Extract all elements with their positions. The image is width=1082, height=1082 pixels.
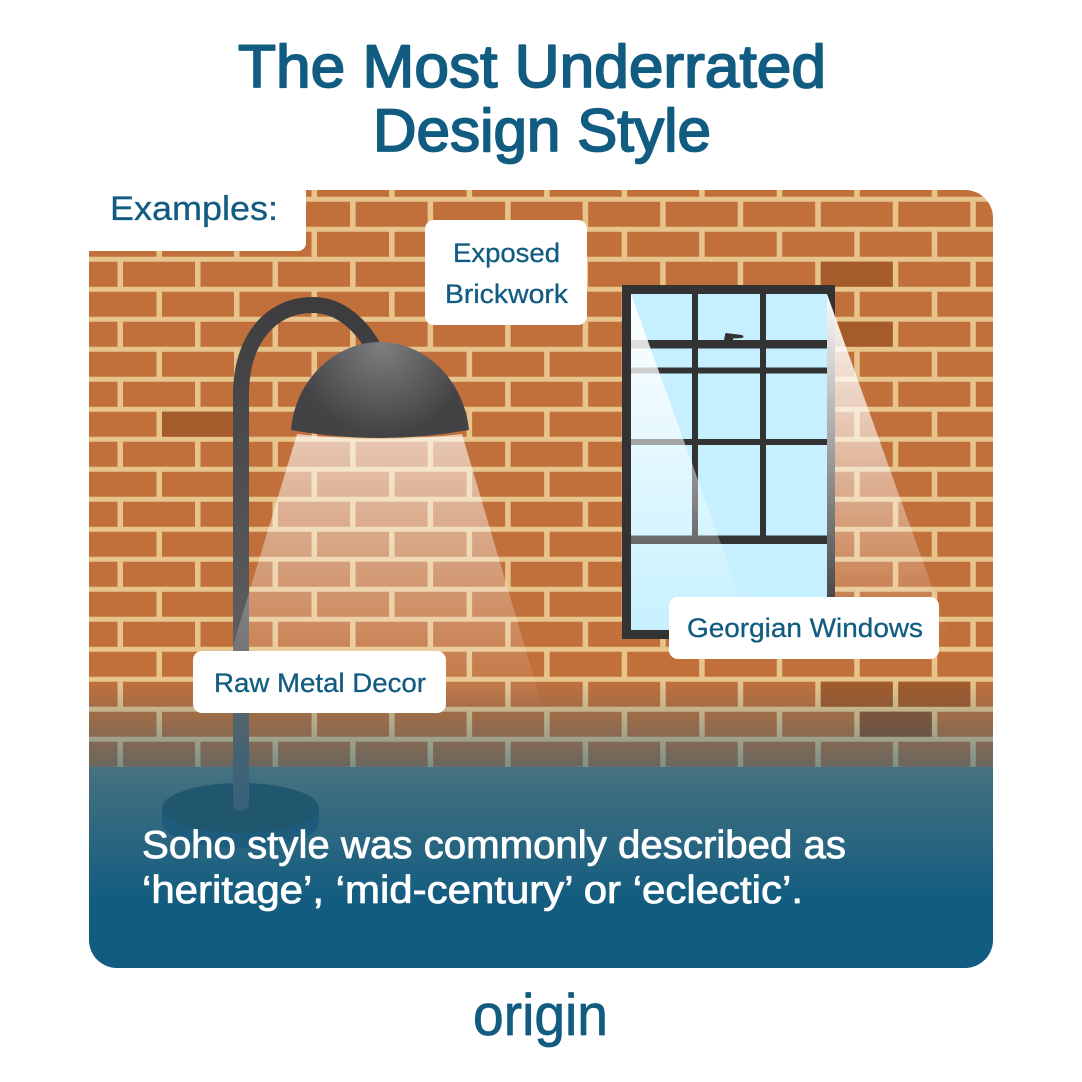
label: raw metal decor xyxy=(193,651,446,713)
title: The Most Underrated xyxy=(238,33,826,100)
label: georgian windows: Georgian Windows xyxy=(687,613,923,643)
floor xyxy=(89,767,993,968)
logo: origin: origin xyxy=(473,983,608,1048)
statement text xyxy=(142,824,846,912)
title: Design Style xyxy=(373,97,711,164)
statement text: Soho style was commonly described as xyxy=(142,824,846,867)
brick wall xyxy=(89,190,993,767)
label: exposed brickwork: Brickwork xyxy=(445,279,569,309)
icon: georgian window xyxy=(622,285,951,640)
label: exposed brickwork: Exposed xyxy=(453,238,560,268)
label: raw metal decor: Raw Metal Decor xyxy=(214,668,426,698)
label: georgian windows xyxy=(669,597,939,659)
title xyxy=(238,33,826,164)
label: examples tab xyxy=(80,185,306,251)
label: examples tab: Examples: xyxy=(110,190,278,228)
icon: floor lamp xyxy=(232,297,538,767)
icon: lamp base xyxy=(162,767,319,848)
statement text: ‘heritage’, ‘mid-century’ or ‘eclectic’. xyxy=(142,869,803,912)
panel: brick wall scene xyxy=(89,190,993,968)
label: exposed brickwork xyxy=(425,220,587,325)
wall shadow fade xyxy=(89,680,993,768)
